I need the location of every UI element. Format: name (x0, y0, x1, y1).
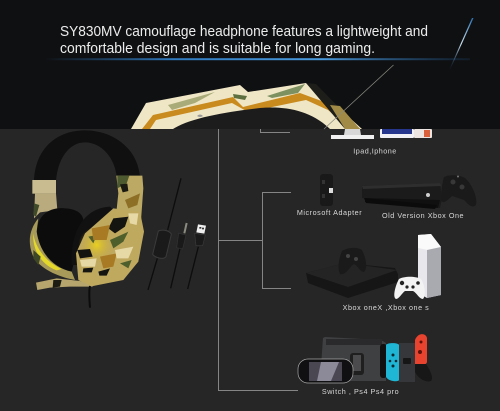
icon: Microsoft adapter (320, 174, 333, 206)
label: Switch, Ps4 Ps4 pro: Switch , Ps4 Ps4 pro (322, 387, 399, 396)
blue underline accent (45, 18, 474, 70)
label: Ipad, Iphone: Ipad,Iphone (353, 146, 397, 156)
cable with inline control (148, 178, 181, 290)
cable with USB plug (188, 224, 206, 289)
left ear cushion (37, 208, 84, 272)
microphone boom (36, 278, 93, 290)
title text: SY830MV camouflage headphone features a lightweight and (60, 23, 428, 40)
left outer shell (30, 218, 75, 280)
enlarged headband detail (131, 83, 362, 129)
label: Microsoft Adapter: Microsoft Adapter (297, 208, 362, 217)
connection lines (218, 129, 298, 390)
right ear cushion (71, 207, 115, 265)
title text: comfortable design and is suitable for long gaming. (60, 40, 375, 57)
top dark band (0, 0, 500, 129)
left slider (32, 180, 56, 194)
cable with 3.5mm jack (171, 223, 187, 288)
thin diagonal pointer line (324, 65, 394, 129)
label: Old Version Xbox One: Old Version Xbox One (382, 211, 464, 220)
right slider (115, 176, 143, 225)
label: Xbox oneX, Xbox one s: Xbox oneX ,Xbox one s (343, 303, 429, 312)
icon: tablet and phone stand (331, 129, 432, 139)
headset product image (30, 130, 144, 308)
right cup (76, 208, 144, 287)
headband (34, 130, 140, 182)
title text (60, 23, 428, 57)
icon: Xbox One console and controller (362, 175, 476, 209)
icon: Xbox One X console and controllers (306, 234, 441, 299)
cable stub (86, 286, 93, 308)
icon: Switch dock and PSP (298, 334, 432, 383)
